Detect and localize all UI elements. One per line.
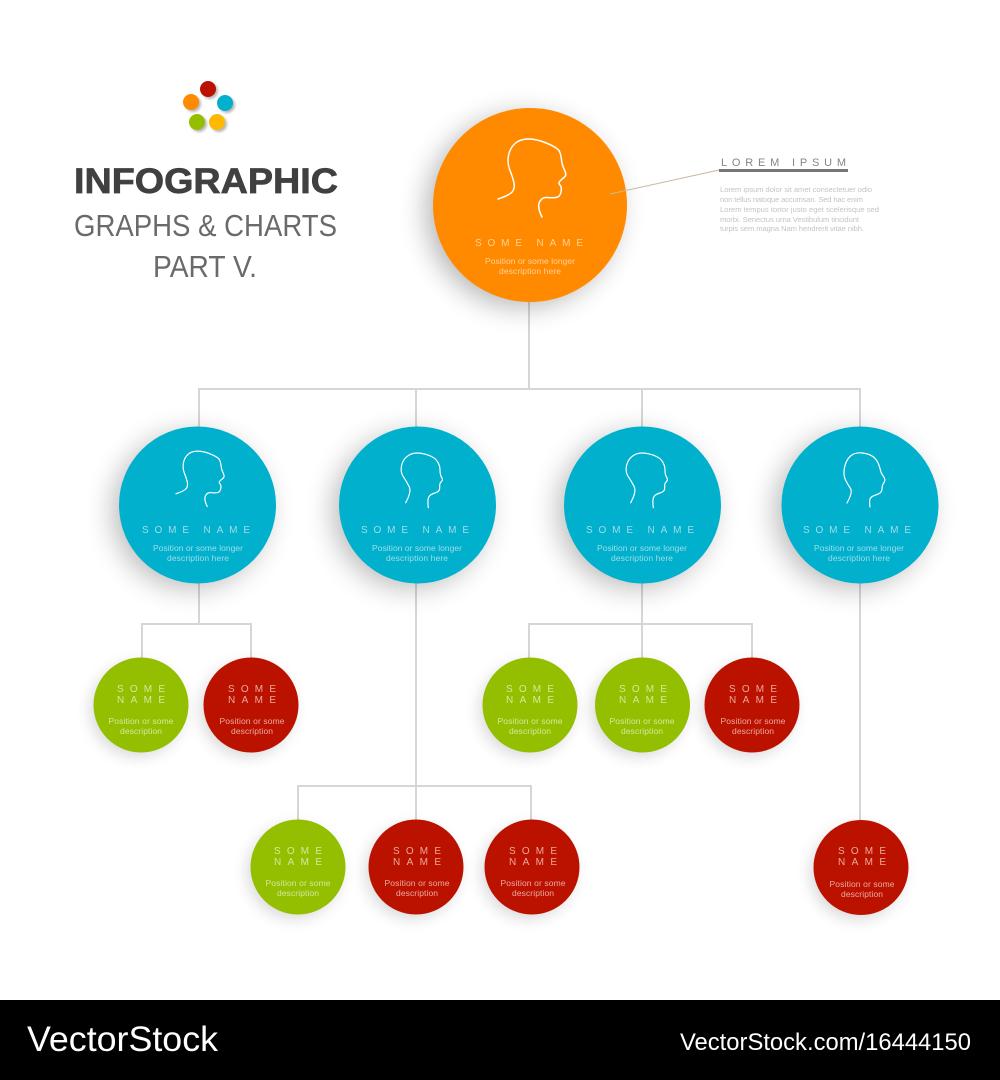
node: red 3: Position or some	[384, 878, 450, 888]
node: green 1: Position or some	[108, 716, 174, 726]
description: Position or some longer	[372, 543, 462, 553]
node: green 1: description	[120, 726, 162, 736]
icon: head profile	[844, 453, 885, 507]
node: blue 4	[775, 426, 938, 588]
title: INFOGRAPHIC	[74, 162, 338, 201]
description: Position or some longer	[597, 543, 687, 553]
description: Position or some longer	[814, 543, 904, 553]
node: green 2: Position or some	[498, 716, 563, 726]
name: SOME NAME	[475, 238, 583, 249]
node: red 4	[482, 820, 580, 918]
node: red 2: NAME	[729, 695, 777, 706]
node: green 3	[592, 658, 690, 756]
callout: lorem ipsum: morbi. Senectus urna Vestibulum tincidunt	[720, 215, 860, 224]
node: red 5: NAME	[838, 857, 886, 868]
icon: head profile	[176, 451, 224, 507]
node: green 1: NAME	[117, 695, 165, 706]
node: green 3: SOME	[619, 684, 667, 695]
description: description here	[499, 266, 561, 276]
callout: lorem ipsum: LOREM IPSUM	[721, 157, 846, 169]
node: green 1	[91, 658, 188, 756]
node: green 4: SOME	[274, 846, 322, 857]
callout: lorem ipsum	[719, 157, 879, 233]
node: green 3: description	[621, 726, 663, 736]
logo: five coloured dots	[183, 81, 235, 132]
name: SOME NAME	[586, 525, 694, 536]
node: red 2: description	[732, 726, 774, 736]
node: green 4	[248, 820, 346, 918]
node: red 2: SOME	[729, 684, 777, 695]
description: Position or some longer	[485, 256, 575, 266]
description: Position or some longer	[153, 543, 243, 553]
icon: head profile	[498, 139, 566, 217]
node: red 4: description	[512, 888, 554, 898]
node: blue 3	[558, 426, 721, 588]
node: green 4: description	[277, 888, 319, 898]
node: red 3: NAME	[393, 857, 441, 868]
node: green 3: Position or some	[610, 716, 675, 726]
node: red 5	[811, 820, 908, 919]
callout: lorem ipsum: Lorem tempus tortor justo eget scelerisque sed	[720, 205, 879, 214]
node: red 2	[702, 658, 800, 756]
node: top orange	[427, 108, 627, 306]
callout: lorem ipsum: turpis sem magna Nam hendrerit vitae nibh.	[720, 224, 864, 233]
node: green 1: SOME	[117, 684, 165, 695]
title	[74, 162, 338, 284]
node: green 4: NAME	[274, 857, 322, 868]
footer bar: VectorStock.com/16444150	[680, 1029, 971, 1056]
node: red 2: Position or some	[720, 716, 786, 726]
node: red 1	[201, 658, 298, 756]
node: green 2: NAME	[506, 695, 554, 706]
description: description here	[386, 553, 448, 563]
description: description here	[611, 553, 673, 563]
node: red 1: description	[231, 726, 273, 736]
connector lines	[142, 295, 860, 830]
node: green 2	[480, 658, 578, 756]
callout: lorem ipsum: Lorem ipsum dolor sit amet consectetuer odio	[720, 185, 872, 194]
node: red 5: SOME	[838, 846, 886, 857]
footer bar: VectorStock	[27, 1020, 219, 1059]
title: GRAPHS & CHARTS	[74, 208, 337, 243]
node: red 4: SOME	[509, 846, 557, 857]
footer bar	[0, 1000, 1000, 1080]
description	[372, 543, 462, 563]
node: green 2: description	[509, 726, 551, 736]
node: green 4: Position or some	[266, 878, 331, 888]
icon: head profile	[626, 453, 667, 508]
node: red 5: Position or some	[830, 879, 895, 889]
description	[814, 543, 904, 563]
callout line	[610, 170, 719, 194]
node: green 2: SOME	[506, 684, 554, 695]
node: red 4: Position or some	[500, 878, 566, 888]
node: red 1: SOME	[228, 684, 276, 695]
callout: lorem ipsum: non tellus natoque accumsan. Sed hac enim	[720, 195, 863, 204]
name: SOME NAME	[803, 525, 911, 536]
description: description here	[828, 553, 890, 563]
node: red 1: NAME	[228, 695, 276, 706]
node: red 1: Position or some	[220, 716, 285, 726]
icon: head profile	[401, 453, 442, 508]
description: description here	[167, 553, 229, 563]
node: red 3	[366, 820, 464, 918]
node: red 3: SOME	[393, 846, 441, 857]
node: red 3: description	[396, 888, 438, 898]
description	[153, 543, 243, 563]
description	[485, 256, 575, 276]
name: SOME NAME	[361, 525, 469, 536]
title: PART V.	[153, 249, 257, 284]
description	[597, 543, 687, 563]
node: blue 2	[333, 426, 496, 588]
node: red 5: description	[841, 889, 883, 899]
node: blue 1	[113, 426, 276, 588]
node: red 4: NAME	[509, 857, 557, 868]
name: SOME NAME	[142, 525, 250, 536]
node: green 3: NAME	[619, 695, 667, 706]
